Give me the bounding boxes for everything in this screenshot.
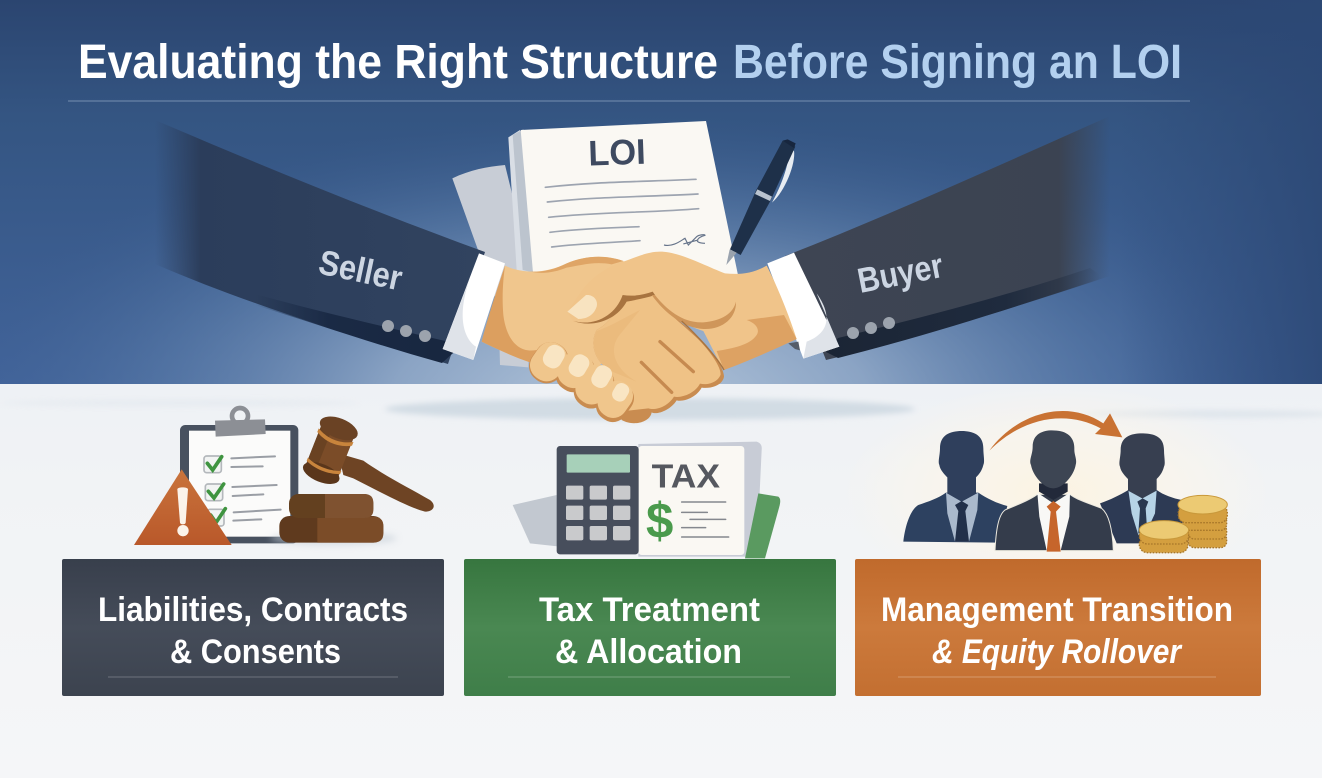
cuffs <box>443 253 839 360</box>
document: LOI letter <box>452 121 738 367</box>
person right <box>1100 433 1183 543</box>
panel: management transition and equity rollover: Management Transition <box>881 591 1233 629</box>
panel: liabilities, contracts and consents <box>62 559 444 696</box>
gavel <box>270 412 434 545</box>
background: white table <box>0 384 1322 778</box>
rollover arrow <box>989 411 1122 451</box>
icon: pen <box>726 139 796 265</box>
thumb nail <box>567 295 597 319</box>
seller sleeve <box>155 120 485 364</box>
calculator <box>557 446 639 554</box>
panel: liabilities, contracts and consents: Liabilities, Contracts <box>98 591 408 629</box>
warning triangle <box>134 469 232 545</box>
handshake <box>443 252 839 428</box>
person left <box>903 431 1007 543</box>
icon: management team, rollover arrow and coins <box>843 383 1270 603</box>
clipboard <box>180 408 298 543</box>
buyer sleeve <box>785 116 1110 360</box>
panel: management transition and equity rollover <box>855 559 1261 696</box>
panel: tax treatment and allocation <box>464 559 836 696</box>
title: Before Signing an LOI <box>733 36 1182 89</box>
title: Evaluating the Right Structure <box>78 36 718 89</box>
title <box>78 36 1182 89</box>
dollar sign: $ <box>646 493 674 549</box>
icon: clipboard, warning triangle and gavel <box>134 408 434 545</box>
panel: management transition and equity rollover: & Equity Rollover <box>932 633 1183 671</box>
front fingers <box>523 336 640 428</box>
table shadow bands <box>0 398 1322 420</box>
panel: tax treatment and allocation: & Allocation <box>555 633 742 671</box>
center hand <box>593 293 724 423</box>
icon: calculator and tax form <box>513 442 780 558</box>
right hand <box>567 252 797 370</box>
TAX label: TAX <box>652 458 720 495</box>
label: Seller: Seller <box>315 243 406 298</box>
LOI heading: LOI <box>588 132 646 174</box>
person center <box>995 430 1113 552</box>
label: Buyer: Buyer <box>854 246 947 301</box>
panel: liabilities, contracts and consents: & Consents <box>170 633 341 671</box>
coin stacks <box>1139 495 1227 553</box>
panel: tax treatment and allocation: Tax Treatment <box>539 591 760 629</box>
left hand <box>482 257 653 372</box>
